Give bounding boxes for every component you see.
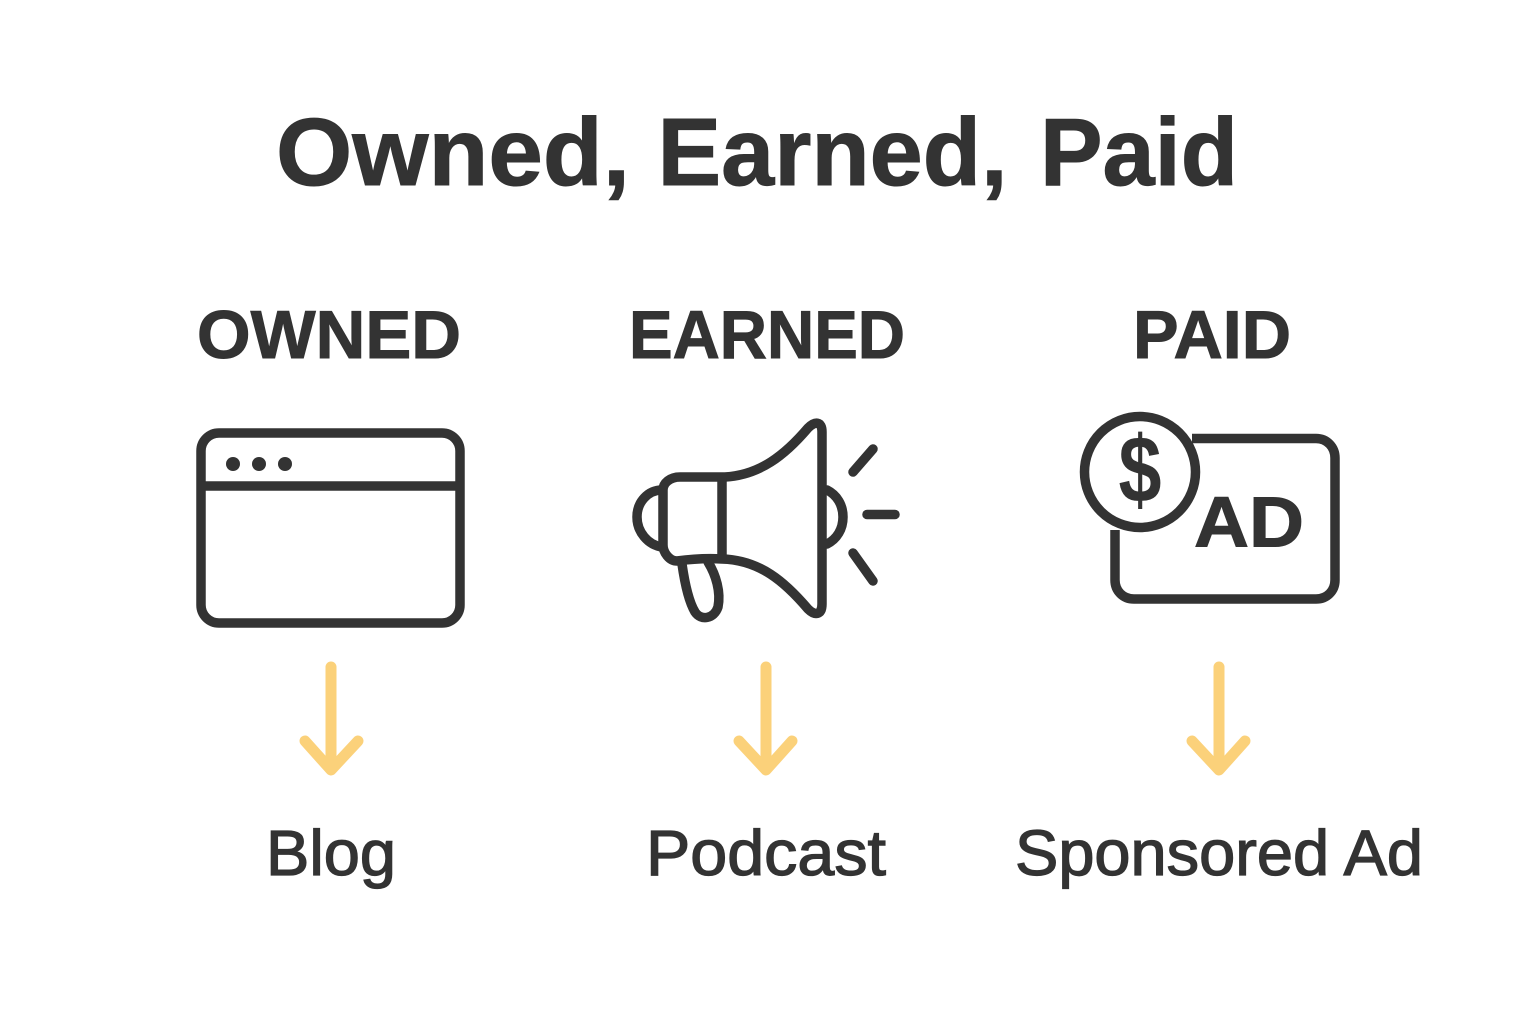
icon: paid ad: $ bbox=[1118, 417, 1162, 523]
title: Owned, bbox=[276, 99, 630, 206]
arrow: paid bbox=[1192, 667, 1245, 770]
icon: paid ad bbox=[1084, 416, 1335, 599]
title: Paid bbox=[1040, 99, 1238, 206]
label: podcast: Podcast bbox=[646, 817, 886, 889]
label: blog: Blog bbox=[266, 817, 396, 889]
arrow: earned bbox=[739, 667, 792, 770]
icon: megaphone bbox=[637, 423, 895, 618]
label: sponsored ad: Sponsored Ad bbox=[1015, 817, 1423, 889]
icon: browser window bbox=[201, 433, 460, 623]
title bbox=[276, 99, 1238, 206]
heading: owned: OWNED bbox=[197, 297, 461, 373]
icon: paid ad: AD bbox=[1194, 484, 1304, 562]
heading: earned: EARNED bbox=[629, 297, 905, 373]
title: Earned, bbox=[658, 99, 1008, 206]
arrow: owned bbox=[305, 667, 358, 770]
heading: paid: PAID bbox=[1133, 297, 1291, 373]
